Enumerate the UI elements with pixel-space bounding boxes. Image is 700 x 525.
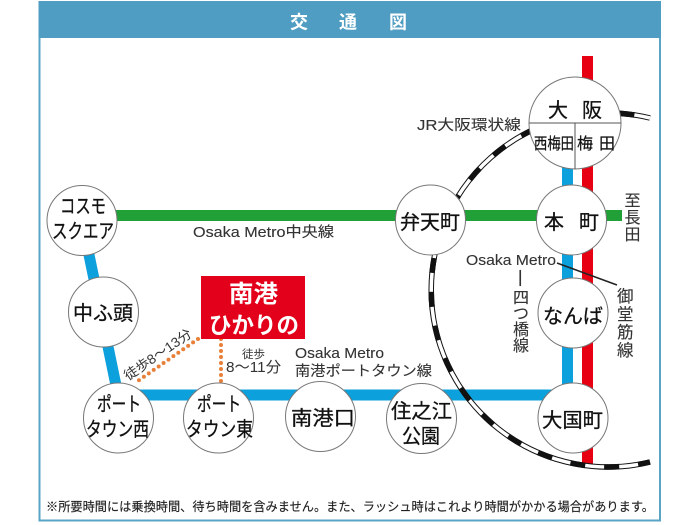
label: Osaka Metro Yotsubashi line: つ: [513, 306, 529, 323]
label: Midosuji line: 筋: [617, 323, 634, 342]
station: Port Town East: ポート: [197, 393, 241, 416]
label: Midosuji line: 御: [617, 287, 634, 306]
label: walk 8-11 minutes: [226, 347, 281, 376]
label: to Nagata (vertical): 長: [624, 209, 641, 227]
destination box: Nanko Hikarino: ひかりの: [209, 312, 299, 338]
label: Midosuji line: [617, 287, 634, 360]
label: to Nagata (vertical): 至: [624, 193, 641, 210]
label: walk 8-11 minutes: 8〜11分: [226, 359, 281, 376]
station: Nankoguchi: [286, 382, 356, 452]
station: Osaka / Nishi-Umeda / Umeda: 西梅田: [534, 135, 574, 153]
footnote: ※所要時間には乗換時間、待ち時間を含みません。また、ラッシュ時はこれより時間がかかる場合があります。: [46, 499, 654, 514]
station: Suminoe Koen: 公園: [402, 425, 440, 448]
line: Osaka Metro Chuo line (green): [110, 210, 622, 221]
line: Midosuji line (red): [582, 56, 593, 464]
station: Daikokucho: 大国町: [542, 409, 603, 432]
label: Osaka Metro Chuo line: Osaka Metro中央線: [193, 224, 335, 241]
label: Osaka Metro Nanko Port Town line: Osaka Metro: [295, 346, 384, 362]
label: walk 8-11 minutes: 徒歩: [242, 347, 265, 361]
station: Namba: なんば: [543, 305, 603, 328]
station: Osaka / Nishi-Umeda / Umeda: 阪: [582, 99, 602, 122]
station: Osaka / Nishi-Umeda / Umeda: 梅: [577, 135, 593, 153]
leader line to Midosuji label: [557, 263, 617, 285]
station: Cosmosquare: [47, 186, 117, 256]
station: Hommachi: 本: [544, 211, 564, 234]
label: Osaka Metro Yotsubashi line: 橋: [513, 321, 529, 339]
station: Port Town West: [84, 383, 154, 453]
station: Hommachi: [536, 185, 606, 255]
station: Nankoguchi: 南港口: [291, 407, 355, 430]
label: Osaka Metro Yotsubashi line: Osaka Metro: [466, 252, 556, 269]
destination box: Nanko Hikarino: [201, 276, 305, 339]
station: Cosmosquare: コスモ: [60, 196, 106, 218]
destination box: Nanko Hikarino: 南港: [229, 281, 278, 308]
station: Suminoe Koen: 住之江: [391, 400, 452, 423]
station: Port Town West: タウン西: [86, 418, 149, 441]
station: Daikokucho: [538, 383, 608, 453]
line: Nanko Port Town line (blue): [88, 250, 560, 395]
station: Osaka / Nishi-Umeda / Umeda: [529, 77, 621, 169]
station: Port Town East: [184, 383, 254, 453]
label: to Nagata (vertical): [624, 193, 641, 244]
station: Namba: [538, 278, 608, 348]
line: Yotsubashi line (blue): [562, 160, 573, 395]
label: Midosuji line: 堂: [617, 305, 634, 324]
label: Midosuji line: 線: [617, 341, 634, 360]
walking route: dotted line to Port Town East: [219, 339, 223, 383]
label: JR Osaka Loop line: JR大阪環状線: [417, 117, 522, 134]
walking route: dotted line to Port Town West: [135, 339, 198, 383]
station: Hommachi: 町: [579, 212, 599, 234]
label: Osaka Metro Nanko Port Town line: 南港ポートタウン線: [295, 363, 433, 380]
station: Port Town East: タウン東: [186, 418, 253, 441]
header bar with title: 通: [339, 12, 357, 32]
label: walk 8-13 minutes (rotated): 徒歩8〜13分: [121, 326, 195, 383]
station: Cosmosquare: スクエア: [52, 220, 114, 243]
station: Nakafuto: 中ふ頭: [73, 302, 133, 325]
label: to Nagata (vertical): 田: [624, 227, 641, 244]
label: Osaka Metro Yotsubashi line: 四: [513, 290, 529, 307]
station: Suminoe Koen: [386, 384, 456, 454]
station: Bentencho: 弁天町: [400, 211, 460, 234]
line: JR Osaka Loop line: [431, 113, 650, 467]
station: Osaka / Nishi-Umeda / Umeda: 大: [548, 99, 568, 122]
station: Port Town West: ポート: [97, 393, 141, 416]
header bar with title: [38, 1, 661, 38]
station: Osaka / Nishi-Umeda / Umeda: 田: [599, 136, 615, 153]
station: Bentencho: [396, 185, 466, 255]
header bar with title: 図: [389, 12, 407, 32]
label: Osaka Metro Yotsubashi line: [466, 252, 556, 355]
station: Nakafuto: [68, 277, 138, 347]
label: Osaka Metro Nanko Port Town line: [295, 346, 433, 380]
header bar with title: 交: [290, 12, 308, 32]
label: Osaka Metro Yotsubashi line: 線: [513, 337, 529, 355]
